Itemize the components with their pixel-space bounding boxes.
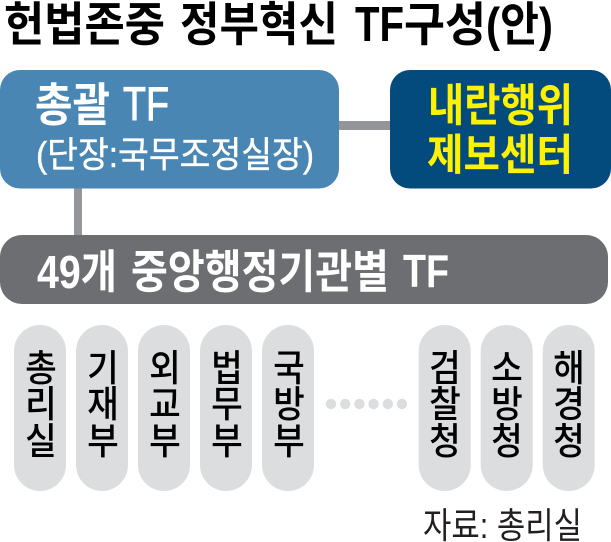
pill: prosecution <box>419 325 471 491</box>
pill: fire agency: 청 <box>491 421 523 462</box>
pill: prosecution: 청 <box>429 421 461 462</box>
panel: insurrection report center <box>390 70 611 188</box>
pill: foreign ministry: 부 <box>149 421 181 462</box>
heading: total TF: 총괄 <box>35 79 110 131</box>
pill: foreign ministry: 외 <box>149 348 181 389</box>
pill: coast guard <box>543 325 595 491</box>
connector: total TF to report center <box>339 121 390 130</box>
text: head of task force: (단장:국무조정실장) <box>36 134 314 175</box>
pill: prime minister office: 총 <box>25 348 57 389</box>
pill: defense ministry: 국 <box>273 348 305 389</box>
pill: fire agency <box>481 325 533 491</box>
pill: coast guard: 해 <box>553 348 585 389</box>
heading: total TF: TF <box>123 77 169 130</box>
pill: coast guard: 경 <box>553 384 585 425</box>
pill: justice ministry: 법 <box>211 348 243 389</box>
pill: foreign ministry: 교 <box>149 384 181 425</box>
text: report center line 2: 제보센터 <box>427 132 573 180</box>
pill: foreign ministry <box>138 325 190 491</box>
pill: finance ministry: 기 <box>87 348 119 389</box>
pill: finance ministry: 재 <box>87 384 119 425</box>
pill: justice ministry <box>200 325 252 491</box>
title <box>4 0 553 52</box>
pill: prime minister office: 실 <box>25 421 57 462</box>
pill: fire agency: 방 <box>491 384 523 425</box>
pill: fire agency: 소 <box>491 348 523 389</box>
pill: finance ministry: 부 <box>87 421 119 462</box>
heading: 49 agency TF: TF <box>403 245 449 297</box>
text: report center line 1: 내란행위 <box>428 80 573 131</box>
pill: defense ministry <box>262 325 314 491</box>
pill: prosecution: 찰 <box>429 384 461 425</box>
heading: total TF <box>35 77 169 131</box>
pill: finance ministry <box>76 325 128 491</box>
pill: prime minister office <box>14 325 66 491</box>
pill: defense ministry: 부 <box>273 421 305 462</box>
pill: prime minister office: 리 <box>25 384 57 425</box>
panel: agency TF bar <box>0 235 608 304</box>
pill: coast guard: 청 <box>553 421 585 462</box>
panel: total TF <box>0 70 339 188</box>
pill: defense ministry: 방 <box>273 384 305 425</box>
heading: 49 agency TF: 49개 <box>37 246 117 298</box>
pill: prosecution: 검 <box>429 348 461 389</box>
heading: 49 agency TF: 중앙행정기관별 <box>131 246 389 298</box>
ellipsis dots <box>326 399 407 409</box>
pill: justice ministry: 부 <box>211 421 243 462</box>
agency pills <box>14 325 595 491</box>
connector: total TF to agency TF <box>74 188 82 236</box>
pill: justice ministry: 무 <box>211 384 243 425</box>
